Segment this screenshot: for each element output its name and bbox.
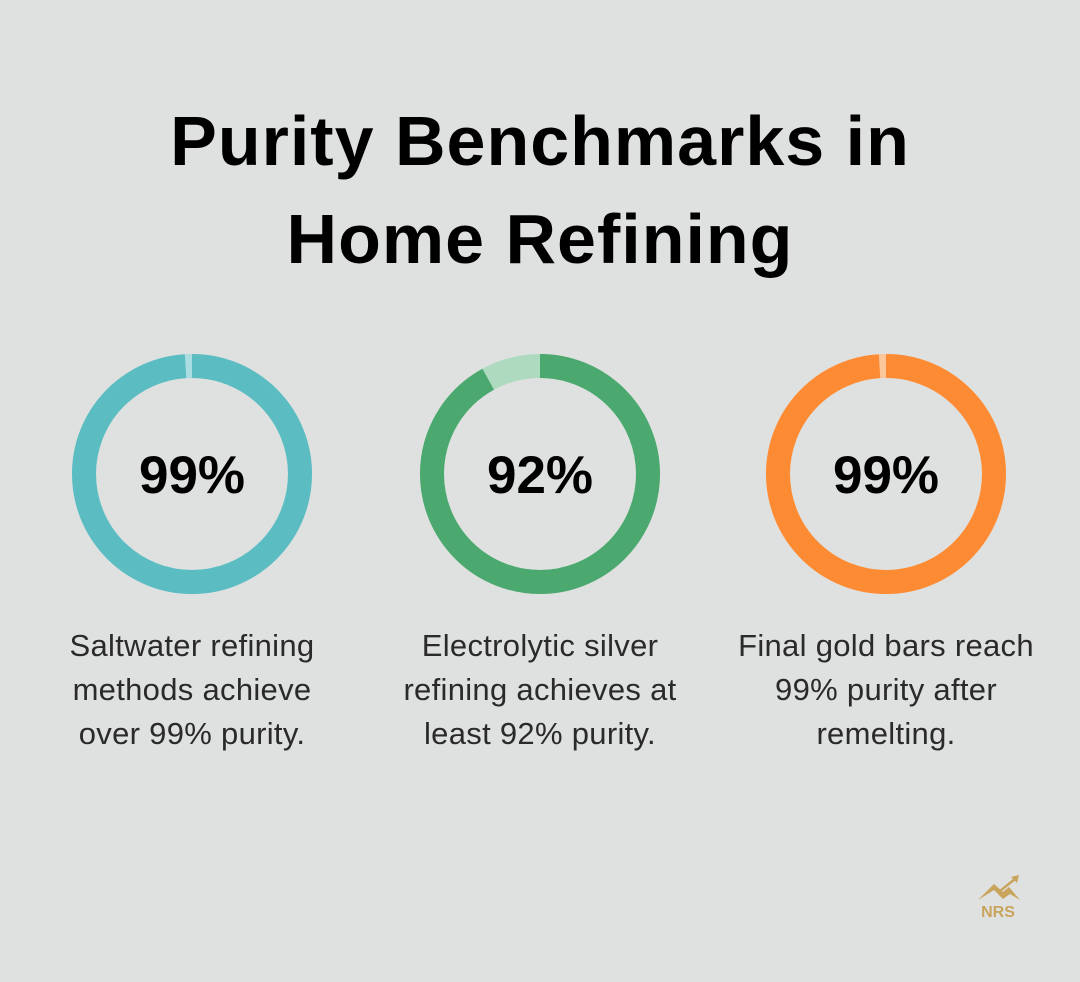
text: gold: 99% purity after: [775, 672, 997, 707]
text: gold: Final gold bars reach: [738, 628, 1034, 663]
text: gold: [738, 628, 1034, 751]
text: saltwater: methods achieve: [73, 672, 311, 707]
ring: gold 99%: 99%: [833, 446, 939, 505]
title: Home Refining: [287, 200, 793, 278]
ring: silver 92%: [432, 366, 648, 582]
ring: saltwater 99%: [84, 366, 300, 582]
ring: gold 99%: [778, 366, 994, 582]
text: saltwater: over 99% purity.: [79, 716, 305, 751]
icon: NRS logo: [978, 875, 1020, 921]
text: gold: remelting.: [816, 716, 956, 751]
text: silver: refining achieves at: [403, 672, 677, 707]
ring: silver 92%: 92%: [487, 446, 593, 505]
title: Purity Benchmarks in: [170, 102, 910, 180]
text: silver: [403, 628, 677, 751]
text: saltwater: Saltwater refining: [70, 628, 314, 663]
title: [170, 102, 910, 278]
text: silver: least 92% purity.: [424, 716, 656, 751]
ring: saltwater 99%: 99%: [139, 446, 245, 505]
text: silver: Electrolytic silver: [422, 628, 658, 663]
icon: NRS logo: NRS: [981, 904, 1015, 921]
text: saltwater: [70, 628, 314, 751]
